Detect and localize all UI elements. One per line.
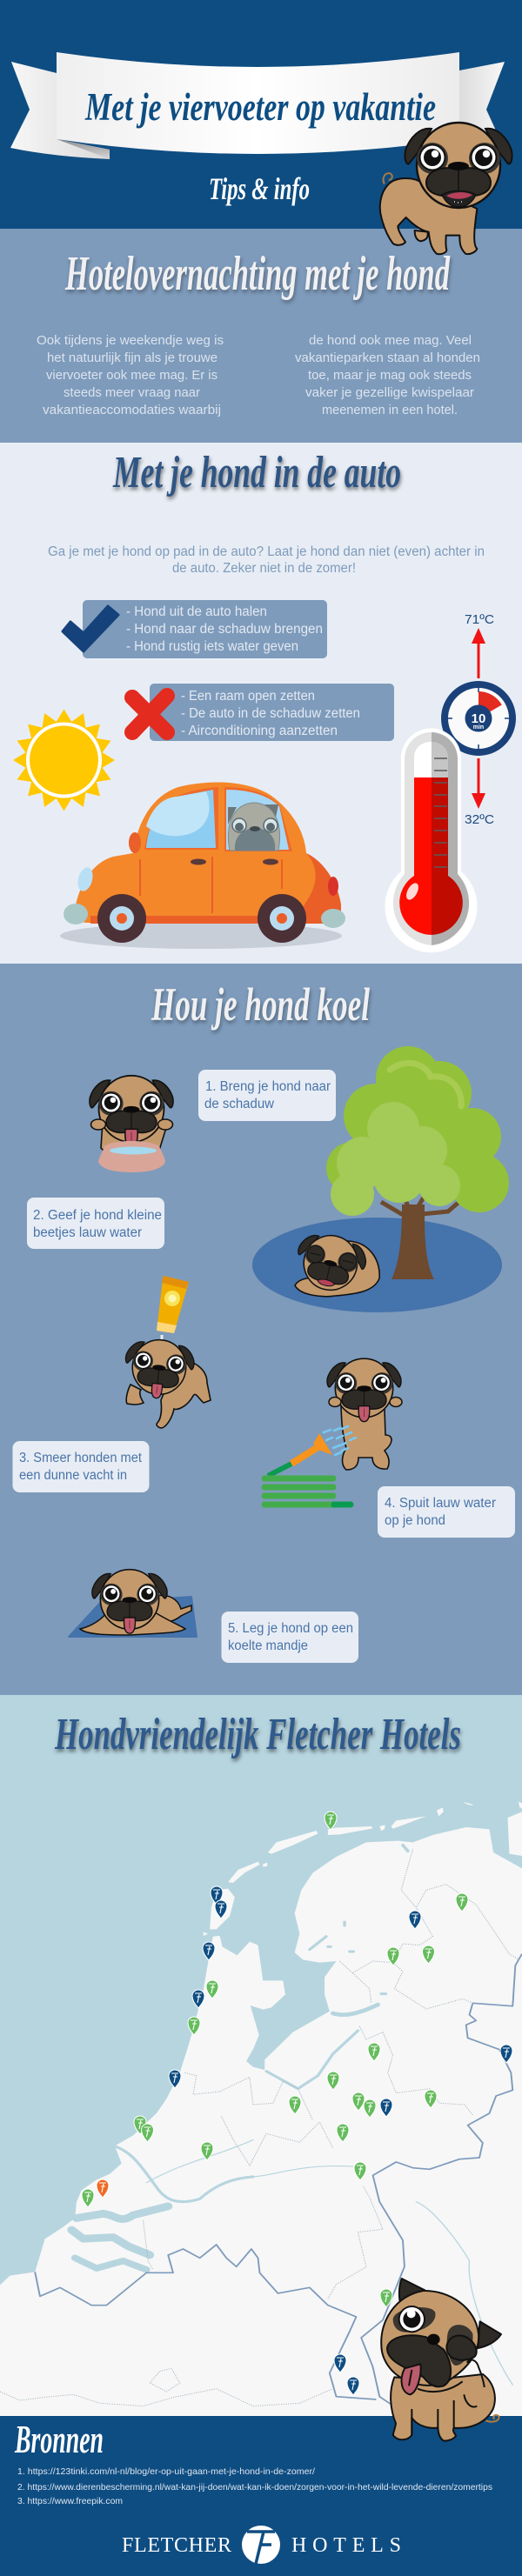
icon: check mark — [63, 606, 118, 651]
text block: hotel left column: vakantieaccomodaties waarbij — [43, 403, 221, 417]
text block: hotel right column: de hond ook mee mag. Veel — [309, 333, 472, 348]
map markers: navy hotels — [169, 1886, 512, 2395]
callout: step 1 — [198, 1070, 336, 1121]
heading: keep cool: Hou je hond koel — [151, 978, 370, 1031]
callout: step 4 — [378, 1486, 515, 1538]
panel: do list — [83, 600, 327, 658]
panel: don't list: - De auto in de schaduw zetten — [181, 706, 360, 721]
panel: do list: - Hond rustig iets water geven — [126, 639, 298, 654]
callout: step 3: een dunne vacht in — [19, 1468, 127, 1483]
text block: source list — [17, 2466, 492, 2506]
illustration: orange car with pug — [60, 782, 345, 949]
illustration: pug under tree — [252, 1046, 509, 1312]
icon: sunscreen tube — [157, 1276, 189, 1344]
callout: step 5: 5. Leg je hond op een — [228, 1621, 353, 1636]
panel: footer background — [0, 2416, 522, 2576]
heading: car section: Met je hond in de auto — [112, 448, 401, 497]
panel: do list: - Hond uit de auto halen — [126, 604, 267, 619]
panel: don't list: - Airconditioning aanzetten — [181, 724, 338, 738]
callout: step 4: op je hond — [385, 1513, 445, 1528]
subtitle: Tips & info — [209, 171, 310, 206]
mainland — [0, 1827, 522, 2441]
water: lakes, channels and estuaries — [266, 1845, 408, 2089]
text block: source list: 3. https://www.freepik.com — [17, 2496, 123, 2506]
label: 32 degrees: 32ºC — [465, 812, 494, 827]
province borders — [0, 1850, 519, 2406]
callout: step 3: 3. Smeer honden met — [19, 1451, 143, 1465]
icon: standing pug — [380, 123, 512, 254]
text block: car intro: de auto. Zeker niet in de zomer! — [172, 561, 356, 576]
sad pug in window — [228, 803, 280, 851]
callout: step 1: de schaduw — [204, 1097, 275, 1111]
callout: step 2: beetjes lauw water — [33, 1225, 142, 1240]
illustration: sitting pug scratching — [381, 2279, 501, 2441]
panel: car section background — [0, 443, 522, 964]
text block: hotel left column — [37, 333, 224, 417]
map marker: orange hotel — [97, 2179, 109, 2198]
panel: don't list: - Een raam open zetten — [181, 689, 315, 704]
national borders — [361, 1954, 522, 2406]
ribbon banner — [10, 52, 505, 159]
icon: timer 10 min — [441, 681, 516, 756]
illustration: running pug with sunscreen — [122, 1337, 211, 1428]
icon: sun — [13, 710, 115, 811]
logo: Fletcher Hotels — [122, 2526, 401, 2564]
logo: Fletcher Hotels: FLETCHER — [122, 2534, 231, 2557]
text block: car intro: Ga je met je hond op pad in de auto? Laat je hond dan niet (even) achter in — [48, 544, 485, 559]
Wadden islands — [203, 1802, 522, 1936]
panel: don't list — [150, 684, 394, 741]
text block: hotel right column: meenemen in een hotel. — [322, 403, 458, 417]
text block: hotel right column: vakantieparken staan al honden — [295, 350, 480, 365]
callout: step 3 — [12, 1441, 150, 1492]
callout: step 2: 2. Geef je hond kleine — [33, 1208, 162, 1223]
icon: timer 10 min: min — [473, 724, 484, 731]
text block: hotel left column: Ook tijdens je weekendje weg is — [37, 333, 224, 348]
callout: step 5 — [221, 1612, 358, 1663]
text block: hotel left column: steeds meer vraag naar — [64, 385, 200, 400]
garden hose — [264, 1426, 356, 1505]
panel: hotel stay background — [0, 229, 522, 443]
icon: timer 10 min: 10 — [472, 711, 485, 726]
callout: step 5: koelte mandje — [228, 1638, 308, 1653]
text block: hotel left column: viervoeter ook mee mag. Er is — [46, 368, 218, 383]
illustration: pug on cooling mat — [69, 1570, 197, 1637]
label: 71 degrees: 71ºC — [465, 612, 494, 627]
logo: Fletcher Hotels: HOTELS — [291, 2534, 401, 2557]
icon: red cross — [132, 696, 167, 732]
text block: source list: 2. https://www.dierenbescherming.nl/wat-kan-jij-doen/wat-kan-ik-doen/zorgen-voor-in-het-wild-levende-dieren/zomertips — [17, 2482, 492, 2493]
illustration: pug drinking from bowl — [90, 1076, 173, 1172]
sleeping pug — [291, 1229, 379, 1297]
panel: do list: - Hond naar de schaduw brengen — [126, 622, 323, 637]
callout: step 2 — [27, 1198, 164, 1249]
text block: hotel right column: vaker je gezellige kwispelaar — [305, 385, 474, 400]
map markers: green hotels — [82, 1812, 468, 2307]
icon: arrow up to 71 degrees — [472, 628, 485, 678]
text block: hotel right column: toe, maar je mag ook steeds — [308, 368, 472, 383]
callout: step 1: 1. Breng je hond naar — [205, 1079, 331, 1094]
text block: source list: 1. https://123tinki.com/nl-nl/blog/er-op-uit-gaan-met-je-hond-in-de-zomer/ — [17, 2466, 315, 2477]
callout: step 4: 4. Spuit lauw water — [385, 1496, 496, 1511]
heading: sources: Bronnen — [14, 2417, 104, 2461]
text block: hotel right column — [295, 333, 480, 417]
icon: arrow down to 32 degrees — [472, 758, 485, 809]
icon: thermometer — [385, 729, 477, 952]
text block: hotel left column: het natuurlijk fijn als je trouwe — [47, 350, 218, 365]
panel: header background — [0, 0, 522, 229]
text block: car intro — [48, 544, 485, 576]
illustration: pug being hosed — [264, 1358, 402, 1505]
panel: map of the Netherlands — [0, 1695, 522, 2441]
panel: keep cool background — [0, 964, 522, 1695]
